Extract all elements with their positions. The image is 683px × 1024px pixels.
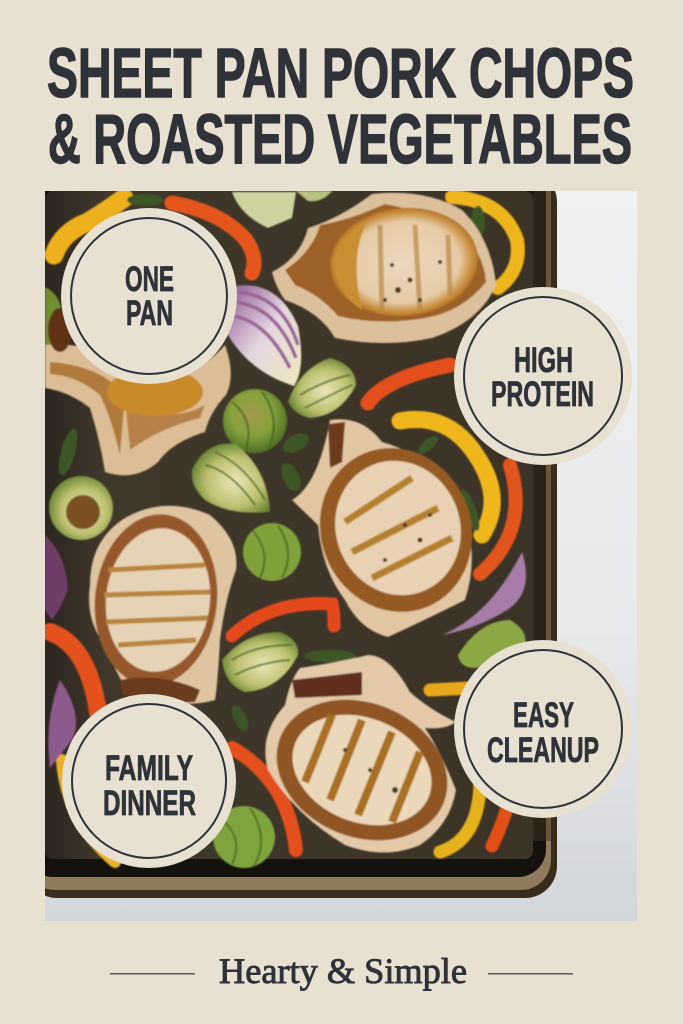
badge: one pan: PAN	[126, 294, 173, 333]
countertop	[45, 191, 637, 921]
pork chop: lower left	[86, 506, 236, 704]
badge: easy cleanup: EASY	[513, 696, 574, 735]
pork chop: top right	[272, 193, 496, 343]
badge: one pan	[61, 208, 237, 384]
pork chop: bottom	[264, 654, 457, 854]
sheet pan	[25, 170, 557, 898]
badge: family dinner: FAMILY	[105, 749, 193, 788]
badge: high protein	[454, 287, 632, 465]
badge: easy cleanup	[454, 640, 632, 818]
pork chop: center	[292, 418, 473, 638]
badge: one pan: ONE	[125, 260, 174, 299]
pork chop: left	[45, 308, 231, 475]
title	[47, 34, 634, 178]
peppers	[50, 197, 518, 862]
badge: high protein: HIGH	[514, 341, 573, 380]
badge: high protein: PROTEIN	[491, 375, 594, 414]
badge: family dinner	[62, 694, 236, 868]
footer tagline: Hearty & Simple	[219, 951, 467, 991]
brussels sprouts	[45, 191, 525, 868]
panel: sheet pan photo	[25, 170, 637, 921]
food	[45, 191, 526, 868]
badge: family dinner: DINNER	[103, 784, 196, 823]
herbs	[55, 194, 485, 733]
onions	[45, 285, 526, 768]
badge: easy cleanup: CLEANUP	[487, 731, 599, 770]
